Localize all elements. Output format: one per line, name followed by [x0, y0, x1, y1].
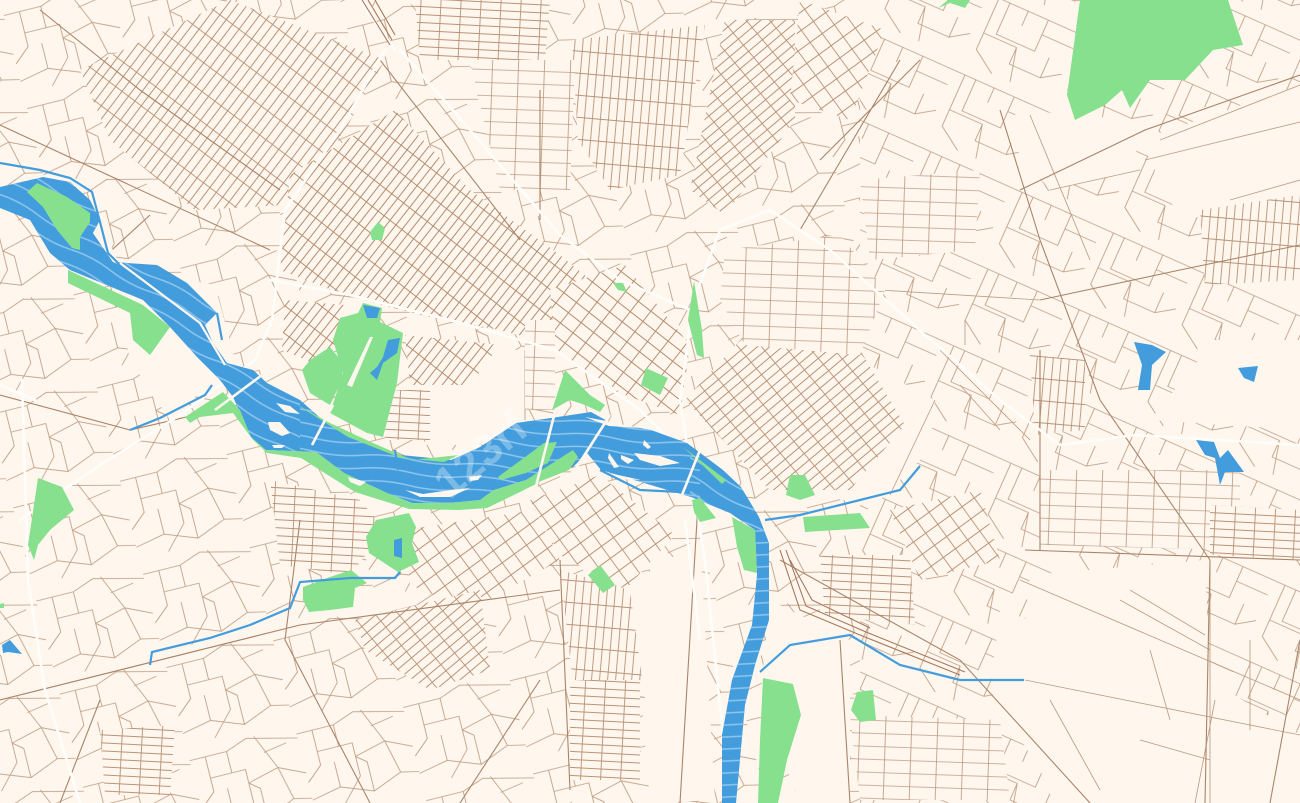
river waves south — [722, 530, 769, 798]
lakes — [2, 305, 1258, 654]
park: downtown — [641, 368, 668, 395]
park: river south strip — [732, 517, 757, 573]
park: south small — [851, 690, 876, 722]
creeks and canal — [0, 163, 1024, 680]
park: north-east big — [1067, 0, 1243, 120]
park: far south — [758, 678, 801, 803]
watermark text: 123rf — [425, 402, 537, 508]
park: square south — [588, 565, 615, 593]
park: west island — [27, 183, 90, 250]
park: top — [938, 0, 970, 8]
park: central large — [330, 303, 403, 437]
lake: park central — [370, 338, 400, 380]
park: east — [786, 475, 815, 500]
park: south-west large — [366, 513, 419, 572]
river waves east — [690, 457, 764, 530]
park: south bank west — [185, 392, 540, 510]
park: north of river — [552, 370, 605, 412]
river islands and bars — [93, 222, 680, 497]
railway tracks — [362, 0, 965, 675]
central park white strip — [347, 337, 373, 387]
bridges — [120, 263, 700, 500]
lake: east 2 — [1238, 366, 1258, 382]
lake: park north — [363, 305, 380, 318]
park: river island — [498, 442, 557, 480]
park: east long — [803, 513, 870, 532]
river waves middle — [300, 408, 700, 503]
lake: south-west park — [394, 538, 402, 558]
park: south-west low — [303, 570, 367, 612]
park: south-west riverbank — [68, 270, 170, 355]
park: central west oval — [302, 347, 343, 405]
park: riverfront east — [683, 447, 726, 484]
park: east strip — [688, 281, 704, 358]
river — [0, 177, 769, 803]
park: edge — [0, 603, 4, 608]
lake: far west — [2, 640, 22, 654]
park: downtown small — [613, 283, 627, 292]
park: river east strip — [692, 498, 716, 522]
open land street fragments — [525, 85, 1300, 803]
park: south river strip — [480, 450, 578, 502]
park: north bank — [294, 403, 459, 462]
park: north small — [370, 222, 385, 240]
lake: east 1 — [1134, 342, 1166, 390]
river waves west — [0, 178, 300, 451]
lake: east 3 — [1196, 440, 1244, 485]
park: far west — [28, 478, 74, 560]
